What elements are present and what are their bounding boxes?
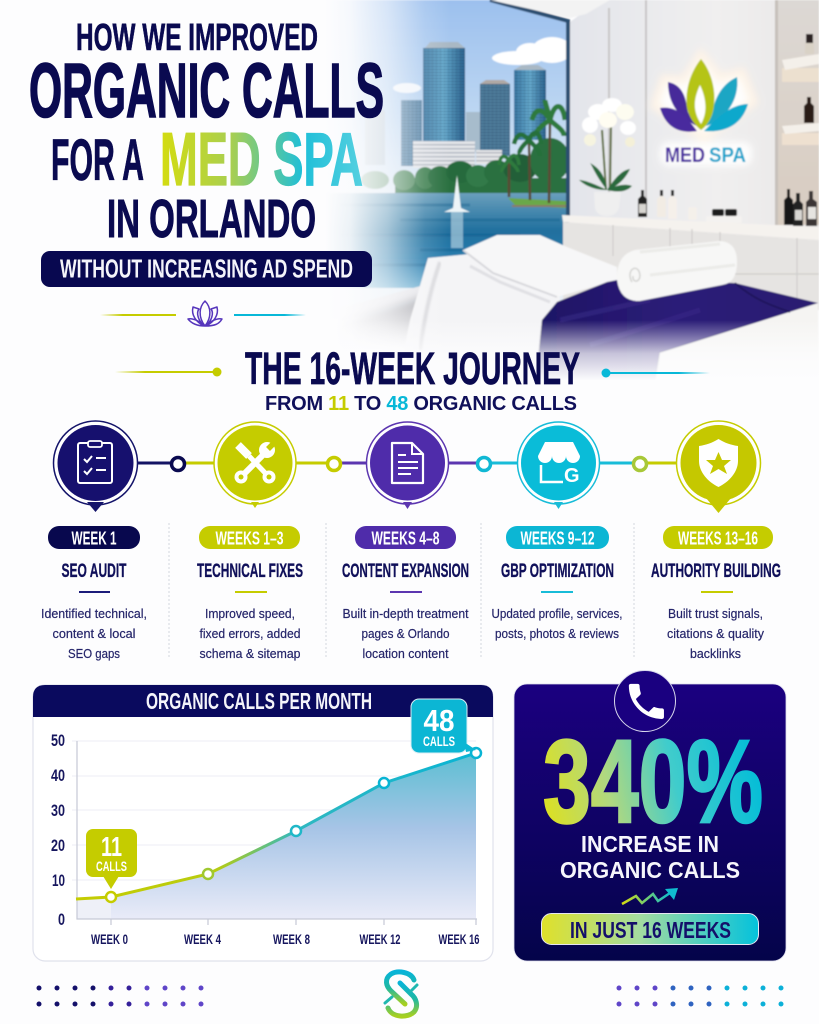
dots: left	[36, 986, 204, 1006]
Med Spa wall logo	[654, 54, 754, 167]
step 1 content: content & local	[52, 626, 136, 641]
callout: 48 calls: 48	[424, 703, 454, 738]
photo fade to white: left	[325, 0, 450, 385]
step 4 content: Updated profile, services,	[492, 606, 622, 621]
hero photo: med spa room with Orlando lake view	[325, 0, 819, 385]
step 3 content	[342, 526, 469, 661]
orchid plant	[579, 98, 636, 216]
step 1 content	[41, 526, 147, 661]
step 2 content: fixed errors, added	[200, 626, 300, 641]
section subheading: FROM 11 TO 48 ORGANIC CALLS	[265, 393, 577, 415]
window sill	[410, 286, 420, 293]
window frame	[490, 0, 568, 240]
step 3 content: WEEKS 4–8	[372, 528, 440, 548]
y axis labels: 50	[51, 731, 65, 750]
footer logo	[385, 972, 417, 1016]
grid lines	[72, 741, 476, 880]
step 2 content	[197, 526, 303, 661]
subtitle pill	[41, 251, 372, 287]
step 4 icon: Google Business storefront: G	[564, 465, 580, 487]
counter bottles	[637, 189, 738, 218]
x axis labels	[91, 931, 480, 947]
step 1 content: SEO AUDIT	[62, 561, 127, 582]
y axis labels: 30	[51, 801, 65, 820]
Med Spa wall logo: MED	[665, 144, 705, 167]
y axis labels: 20	[51, 836, 65, 855]
subtitle pill: WITHOUT INCREASING AD SPEND	[60, 254, 353, 284]
massage bed with pillow, blanket and towel	[398, 235, 819, 385]
counter and cabinets	[562, 215, 819, 310]
timeline connectors	[137, 458, 676, 470]
chart header: ORGANIC CALLS PER MONTH	[146, 688, 372, 714]
title highlight: MED SPA: MED SPA	[160, 117, 363, 201]
stat caption: INCREASE IN	[581, 831, 719, 857]
callout: 11 calls: CALLS	[96, 858, 127, 874]
column dividers	[169, 523, 634, 658]
step 2 content: WEEKS 1–3	[216, 528, 284, 548]
icon: phone	[614, 670, 676, 732]
axes	[77, 741, 477, 925]
step 5 icon: shield with star	[676, 421, 760, 513]
window view: skyline and lake	[337, 0, 568, 302]
step 5 content: citations & quality	[667, 626, 764, 641]
step 1 icon: clipboard	[54, 421, 138, 512]
step 3 content: Built in-depth treatment	[342, 606, 469, 621]
lotus divider	[100, 301, 306, 326]
step 4 content	[492, 526, 622, 641]
step 2 content: Improved speed,	[205, 606, 295, 621]
x axis labels: WEEK 16	[438, 931, 480, 947]
section heading: 16-week journey	[115, 343, 710, 415]
room wall	[568, 0, 819, 227]
step 5 content	[651, 526, 781, 661]
panel: organic calls line chart	[33, 685, 493, 961]
callout: 48 calls: CALLS	[423, 733, 455, 749]
stat caption	[560, 831, 740, 883]
wall shelves with bottles	[775, 0, 819, 226]
step 3 content: pages & Orlando	[362, 626, 450, 641]
step 3 icon: document	[366, 422, 448, 509]
step 4 content: posts, photos & reviews	[495, 626, 619, 641]
title line 3 lead: FOR A	[51, 128, 144, 193]
data points	[106, 748, 481, 902]
icon: trend arrow	[622, 888, 678, 904]
palms	[509, 120, 550, 203]
step 5 content: Built trust signals,	[668, 606, 763, 621]
stat caption: ORGANIC CALLS	[560, 857, 740, 883]
y axis labels: 40	[51, 766, 65, 785]
title line 1: HOW WE IMPROVED	[76, 17, 318, 59]
y axis labels: 10	[52, 871, 65, 890]
area fill	[111, 753, 476, 919]
step 2 icon: wrench and screwdriver	[214, 422, 296, 508]
x axis labels: WEEK 8	[273, 931, 310, 947]
step 4 content: WEEKS 9–12	[520, 528, 594, 548]
callout: 11 calls	[86, 829, 137, 889]
step 4 icon: Google Business storefront	[518, 422, 600, 509]
x axis labels: WEEK 12	[360, 931, 401, 947]
step 5 content: WEEKS 13–16	[678, 528, 758, 548]
y axis labels	[51, 731, 65, 929]
section heading: 16-week journey: THE 16-WEEK JOURNEY	[245, 343, 580, 394]
panel: 340% increase stat	[514, 670, 786, 961]
y axis labels: 0	[58, 910, 65, 929]
stat pill	[542, 914, 758, 944]
step 3 content: location content	[362, 646, 449, 661]
step 1 content: SEO gaps	[68, 646, 120, 661]
chart header	[33, 685, 493, 717]
x axis labels: WEEK 4	[184, 931, 221, 947]
callout: 48 calls	[411, 699, 476, 753]
photo fade to white: bottom	[325, 320, 819, 381]
data line	[76, 753, 476, 899]
step 2 content: TECHNICAL FIXES	[197, 561, 303, 582]
title line 4: IN ORLANDO	[107, 189, 316, 249]
step 1 content: Identified technical,	[41, 606, 147, 621]
title line 2: ORGANIC CALLS	[29, 48, 384, 134]
stat pill: IN JUST 16 WEEKS	[570, 917, 731, 943]
callout: 11 calls: 11	[101, 831, 122, 862]
step 1 content: WEEK 1	[72, 528, 116, 548]
step 5 content: backlinks	[690, 646, 741, 661]
step 3 content: CONTENT EXPANSION	[342, 561, 469, 582]
x axis labels: WEEK 0	[91, 931, 128, 947]
dots: right	[616, 986, 784, 1006]
step 4 content: GBP OPTIMIZATION	[501, 561, 614, 582]
title block	[29, 17, 384, 249]
Med Spa wall logo: SPA	[709, 144, 746, 167]
step 2 content: schema & sitemap	[200, 646, 300, 661]
